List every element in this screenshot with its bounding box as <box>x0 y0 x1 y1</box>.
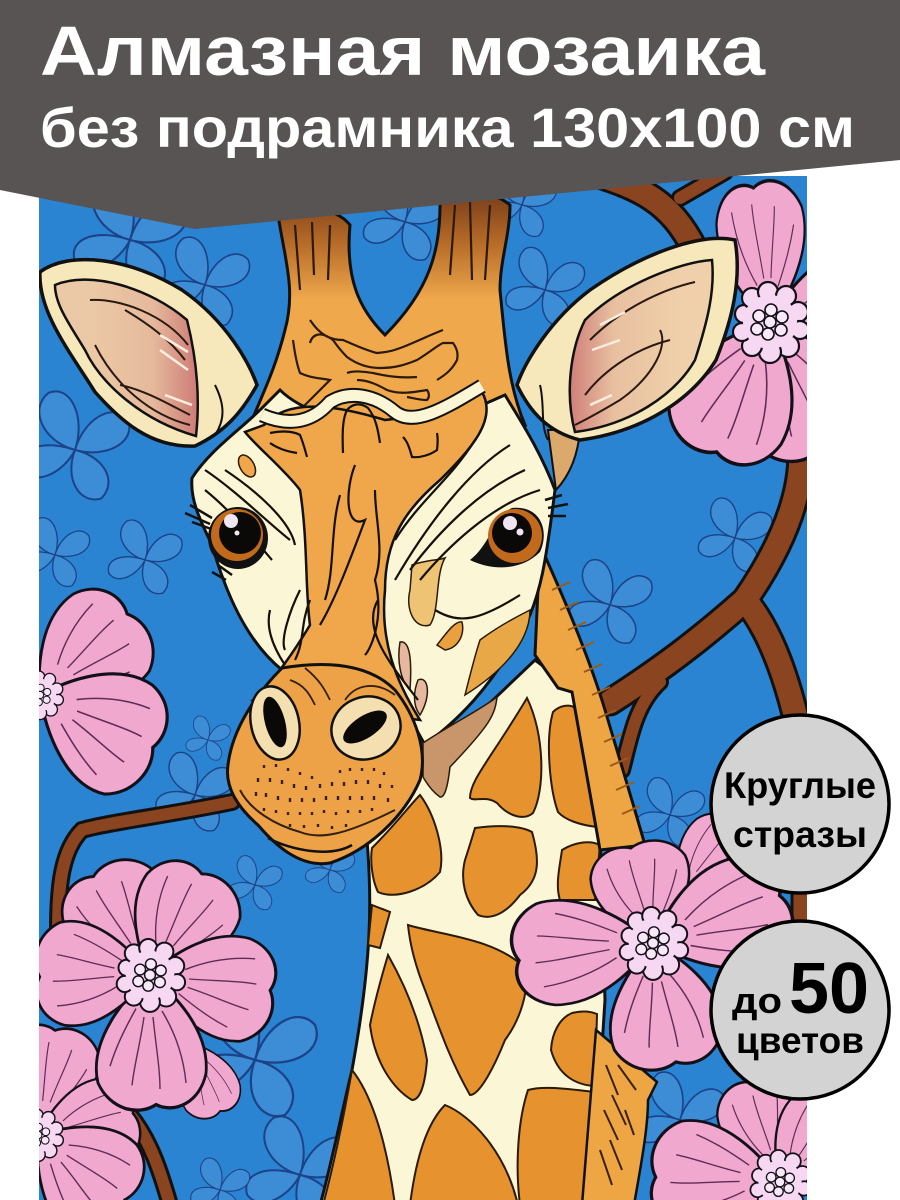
header banner <box>0 0 900 229</box>
background: blue canvas <box>39 176 807 1200</box>
flower: left edge <box>39 588 169 796</box>
branches <box>58 172 805 1200</box>
blue leaf clusters <box>21 168 772 1200</box>
head: orange blaze <box>245 392 487 720</box>
badge: round rhinestones <box>711 715 889 893</box>
badge: round rhinestones: Круглые <box>724 765 876 806</box>
head: cream brow band <box>262 386 482 421</box>
title: line 1: Алмазная мозаика <box>40 12 766 90</box>
badge: up to 50 colours: до <box>732 980 782 1021</box>
head: jaw shading and cheek spots <box>235 452 530 797</box>
title: line 2: без подрамника 130х100 см <box>40 96 855 159</box>
badge: up to 50 colours: 50 <box>789 949 869 1029</box>
nostril: right <box>330 695 402 761</box>
flower: top right <box>668 178 807 467</box>
muzzle <box>227 664 422 864</box>
eye: right <box>470 495 568 567</box>
badge: up to 50 colours: цветов <box>736 1020 864 1061</box>
badge: up to 50 colours <box>711 921 889 1099</box>
flower: front right <box>508 801 804 1076</box>
head: line work <box>205 404 540 700</box>
head: cream base <box>192 390 555 745</box>
eye: left <box>185 505 268 580</box>
flower: bottom right <box>650 1081 807 1200</box>
flower: bottom left <box>39 858 278 1120</box>
ossicones and upper head <box>250 192 525 425</box>
neck patches <box>323 698 600 1200</box>
whisker dots <box>256 764 392 829</box>
badge: round rhinestones: стразы <box>733 814 867 855</box>
neck <box>320 660 605 1200</box>
nostril: left <box>248 685 301 761</box>
mane <box>535 545 657 1200</box>
flower: lower left edge <box>39 1023 146 1200</box>
painting: giraffe among pink flowers <box>39 176 807 1200</box>
ear: right <box>517 238 737 440</box>
neck behind right ear <box>548 430 580 490</box>
ear: left <box>40 260 257 446</box>
